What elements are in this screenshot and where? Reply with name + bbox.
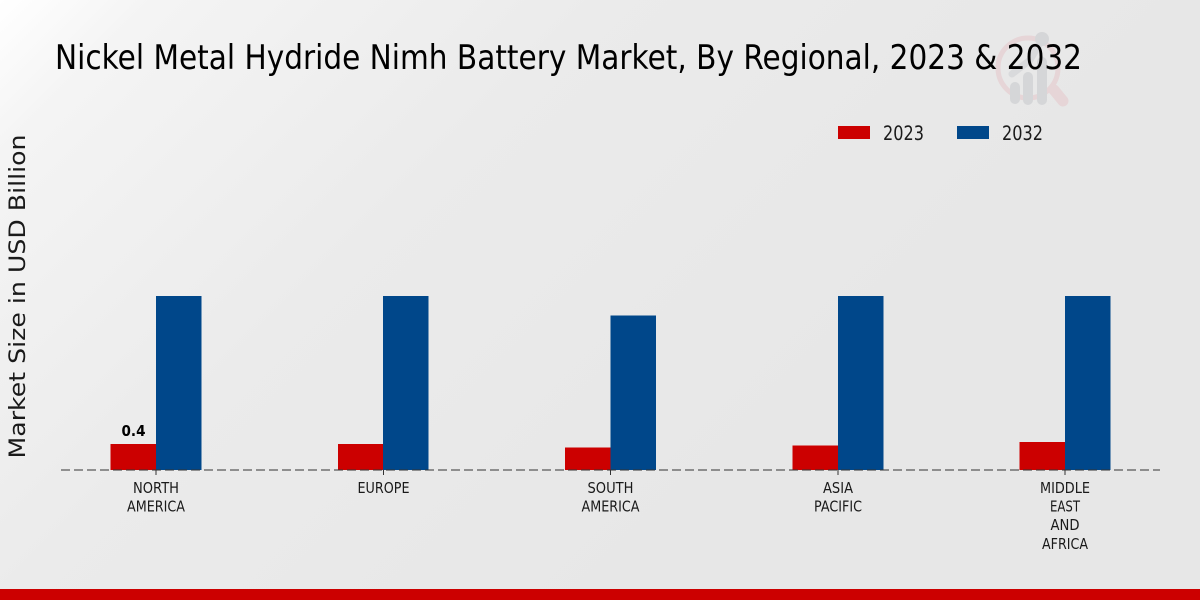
bars: Europe: [338, 296, 428, 470]
legend: 2032 swatch: [957, 126, 989, 139]
legend: [838, 122, 1043, 145]
bars: Asia Pacific: [792, 296, 884, 470]
legend: 2023 swatch: [838, 126, 870, 139]
label: South America: SOUTH: [588, 479, 634, 497]
label: South America: AMERICA: [582, 498, 640, 516]
x-axis baseline: [61, 469, 1160, 471]
bars: Middle East and Africa: [1020, 296, 1110, 470]
bars: North America: [110, 296, 202, 470]
legend: 2032 label: 2032: [1002, 122, 1043, 145]
label: Asia Pacific: PACIFIC: [814, 498, 862, 516]
footer bar: [0, 589, 1200, 600]
label: Middle East and Africa: AFRICA: [1042, 535, 1088, 553]
bar chart: [61, 296, 1160, 475]
label: Asia Pacific: ASIA: [823, 479, 853, 497]
label: Middle East and Africa: AND: [1050, 516, 1080, 534]
bars: South America: [565, 316, 656, 470]
x-axis labels: [127, 479, 1090, 553]
data label: 0.4: 0.4: [122, 422, 146, 440]
legend: 2023 label: 2023: [883, 122, 924, 145]
y-axis label: Market Size in USD Billion: [5, 134, 31, 458]
label: North America: NORTH: [133, 479, 179, 497]
label: Middle East and Africa: MIDDLE: [1040, 479, 1090, 497]
label: Europe: EUROPE: [358, 479, 410, 497]
label: North America: AMERICA: [127, 498, 185, 516]
label: Middle East and Africa: EAST: [1050, 498, 1080, 516]
icon: watermark logo: [998, 32, 1063, 101]
